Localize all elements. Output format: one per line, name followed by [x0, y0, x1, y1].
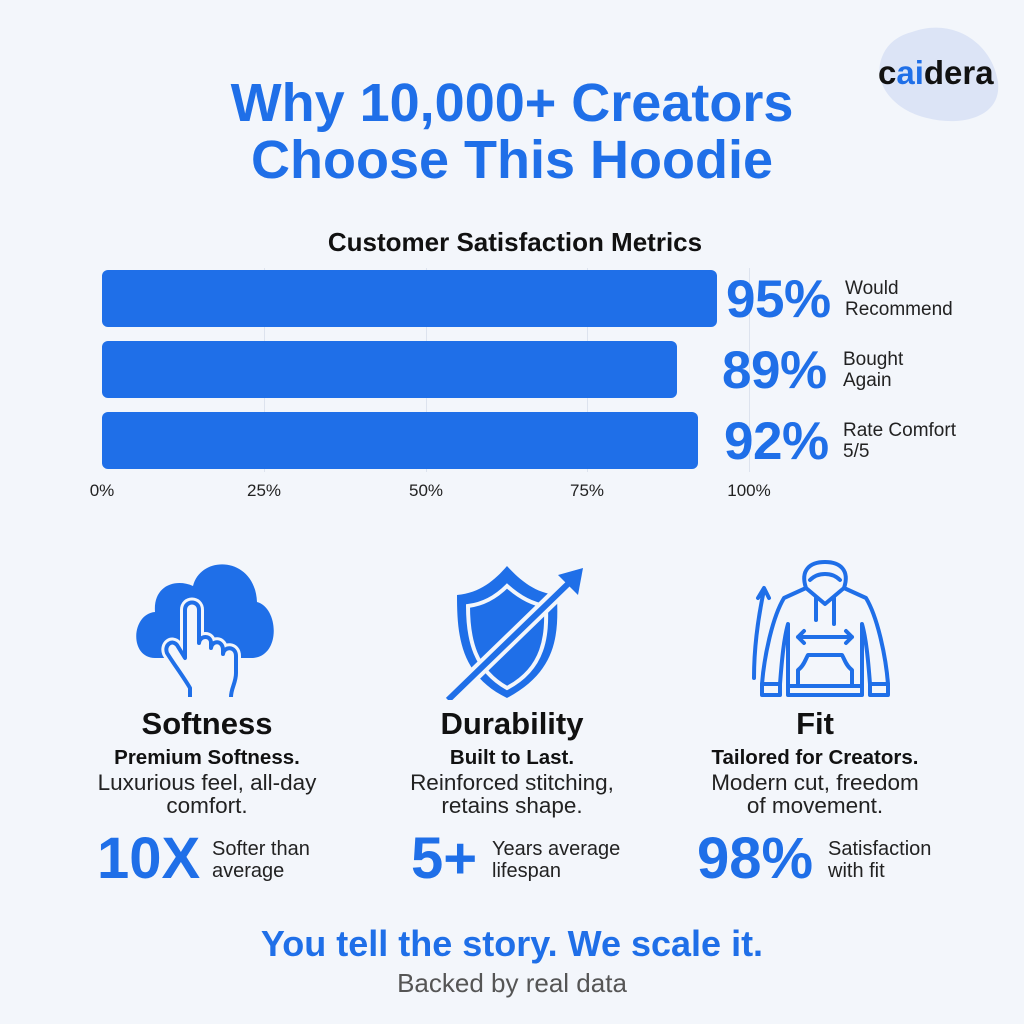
stat label fit: [828, 838, 931, 882]
label bought again: [843, 349, 904, 391]
stat label lifespan: Years average: [492, 838, 620, 860]
label rate comfort: Rate Comfort: [843, 420, 956, 441]
stat: 98%: 98%: [697, 826, 813, 891]
chart: customer satisfaction: [90, 227, 956, 500]
feature: softness: [98, 706, 316, 818]
axis labels: 50%: [409, 481, 443, 500]
subtagline: Backed by real data: [397, 968, 627, 998]
logo: caidera: [878, 54, 994, 91]
feature: softness: Softness: [142, 706, 272, 741]
value 89%: 89%: [722, 341, 827, 400]
feature: fit: Fit: [796, 706, 834, 741]
axis labels: 0%: [90, 481, 114, 500]
bar: bought again: [102, 341, 677, 398]
feature: fit: of movement.: [747, 793, 883, 818]
icon: hoodie: [752, 560, 890, 697]
stat label lifespan: [492, 838, 620, 882]
label would recommend: Recommend: [845, 299, 953, 320]
label bought again: Again: [843, 370, 892, 391]
stat label fit: with fit: [828, 860, 885, 882]
tagline: You tell the story. We scale it.: [261, 923, 763, 964]
title: [230, 73, 793, 190]
stat label softer: [212, 838, 310, 882]
feature: durability: Durability: [441, 706, 583, 741]
feature: fit: Tailored for Creators.: [712, 746, 918, 769]
stat label fit: Satisfaction: [828, 838, 931, 860]
label would recommend: [845, 278, 953, 320]
value 92%: 92%: [724, 412, 829, 471]
stat label softer: average: [212, 860, 284, 882]
title: Choose This Hoodie: [251, 130, 773, 190]
axis labels: [90, 481, 771, 500]
icon: cloud with hand: [136, 564, 274, 697]
stat: 10X: 10X: [97, 826, 200, 891]
label rate comfort: 5/5: [843, 441, 869, 462]
label would recommend: Would: [845, 278, 899, 299]
chart title: Customer Satisfaction Metrics: [328, 227, 702, 257]
icon: shield with arrow: [446, 566, 583, 700]
feature: fit: [711, 706, 919, 818]
feature: softness: Premium Softness.: [114, 746, 300, 769]
stat: 5+: 5+: [411, 826, 477, 891]
label rate comfort: [843, 420, 956, 462]
feature: durability: Reinforced stitching,: [410, 770, 614, 795]
bar: would recommend: [102, 270, 717, 327]
feature: durability: retains shape.: [441, 793, 583, 818]
feature: softness: Luxurious feel, all-day: [98, 770, 316, 795]
feature: softness: comfort.: [166, 793, 248, 818]
stat label lifespan: lifespan: [492, 860, 561, 882]
value 95%: 95%: [726, 270, 831, 329]
feature: durability: Built to Last.: [450, 746, 574, 769]
stat label softer: Softer than: [212, 838, 310, 860]
bar: rate comfort: [102, 412, 698, 469]
feature: durability: [410, 706, 614, 818]
axis labels: 25%: [247, 481, 281, 500]
logo: [878, 28, 998, 121]
title: Why 10,000+ Creators: [231, 73, 793, 133]
feature: fit: Modern cut, freedom: [711, 770, 919, 795]
label bought again: Bought: [843, 349, 903, 370]
axis labels: 75%: [570, 481, 604, 500]
axis labels: 100%: [727, 481, 771, 500]
